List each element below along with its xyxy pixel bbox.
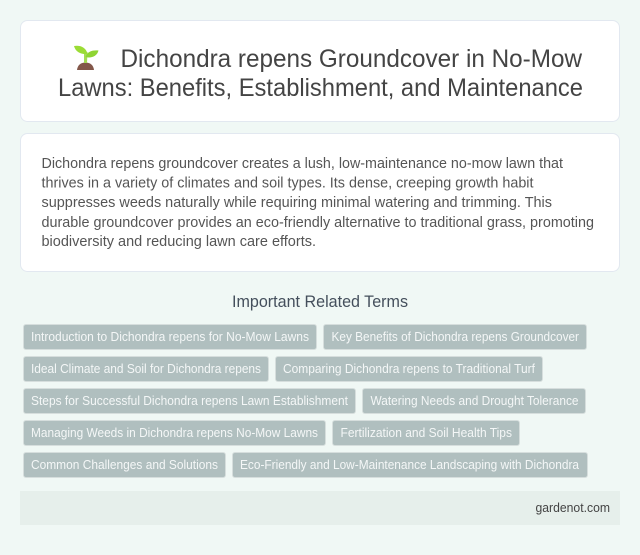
tag: Common Challenges and Solutions [31,457,218,472]
panel: footer [20,491,620,525]
tag: Watering Needs and Drought Tolerance [370,393,578,408]
tag [24,420,326,446]
panel: related term tags [24,324,588,478]
tag: Key Benefits of Dichondra repens Groundcover [332,329,580,344]
heading: related terms: Important Related Terms [232,293,408,311]
title line 1: Dichondra repens Groundcover in No-Mow [120,45,583,73]
description text: durable groundcover provides an eco-friendly alternative to traditional grass, promoting [42,215,594,231]
tag: Managing Weeds in Dichondra repens No-Mow Lawns [31,425,318,440]
description text: thrives in a variety of climates and soil types. Its dense, creeping growth habit [42,176,534,192]
tag [24,388,356,414]
tag [24,452,226,478]
tag: Fertilization and Soil Health Tips [340,425,512,440]
tag [362,388,586,414]
tag [24,356,268,382]
tag: Eco-Friendly and Low-Maintenance Landscaping with Dichondra [240,457,580,472]
description text: biodiversity and reducing lawn care efforts. [42,234,316,250]
description text: Dichondra repens groundcover creates a lush, low-maintenance no-mow lawn that [42,156,563,172]
panel: title card [20,20,620,122]
icon: seedling [74,46,98,70]
tag [24,324,316,350]
description text: suppresses weeds naturally while requiring minimal watering and trimming. This [42,195,552,211]
footer source text: gardenot.com [536,501,610,515]
tag [276,356,542,382]
tag: Introduction to Dichondra repens for No-Mow Lawns [31,329,309,344]
tag [324,324,586,350]
tag [232,452,588,478]
title line 2: Lawns: Benefits, Establishment, and Maintenance [58,74,583,102]
tag [332,420,520,446]
tag: Comparing Dichondra repens to Traditional Turf [283,361,535,376]
description text [42,156,594,250]
panel: description [20,134,620,272]
tag: Ideal Climate and Soil for Dichondra repens [31,361,261,376]
tag: Steps for Successful Dichondra repens Lawn Establishment [31,393,348,408]
